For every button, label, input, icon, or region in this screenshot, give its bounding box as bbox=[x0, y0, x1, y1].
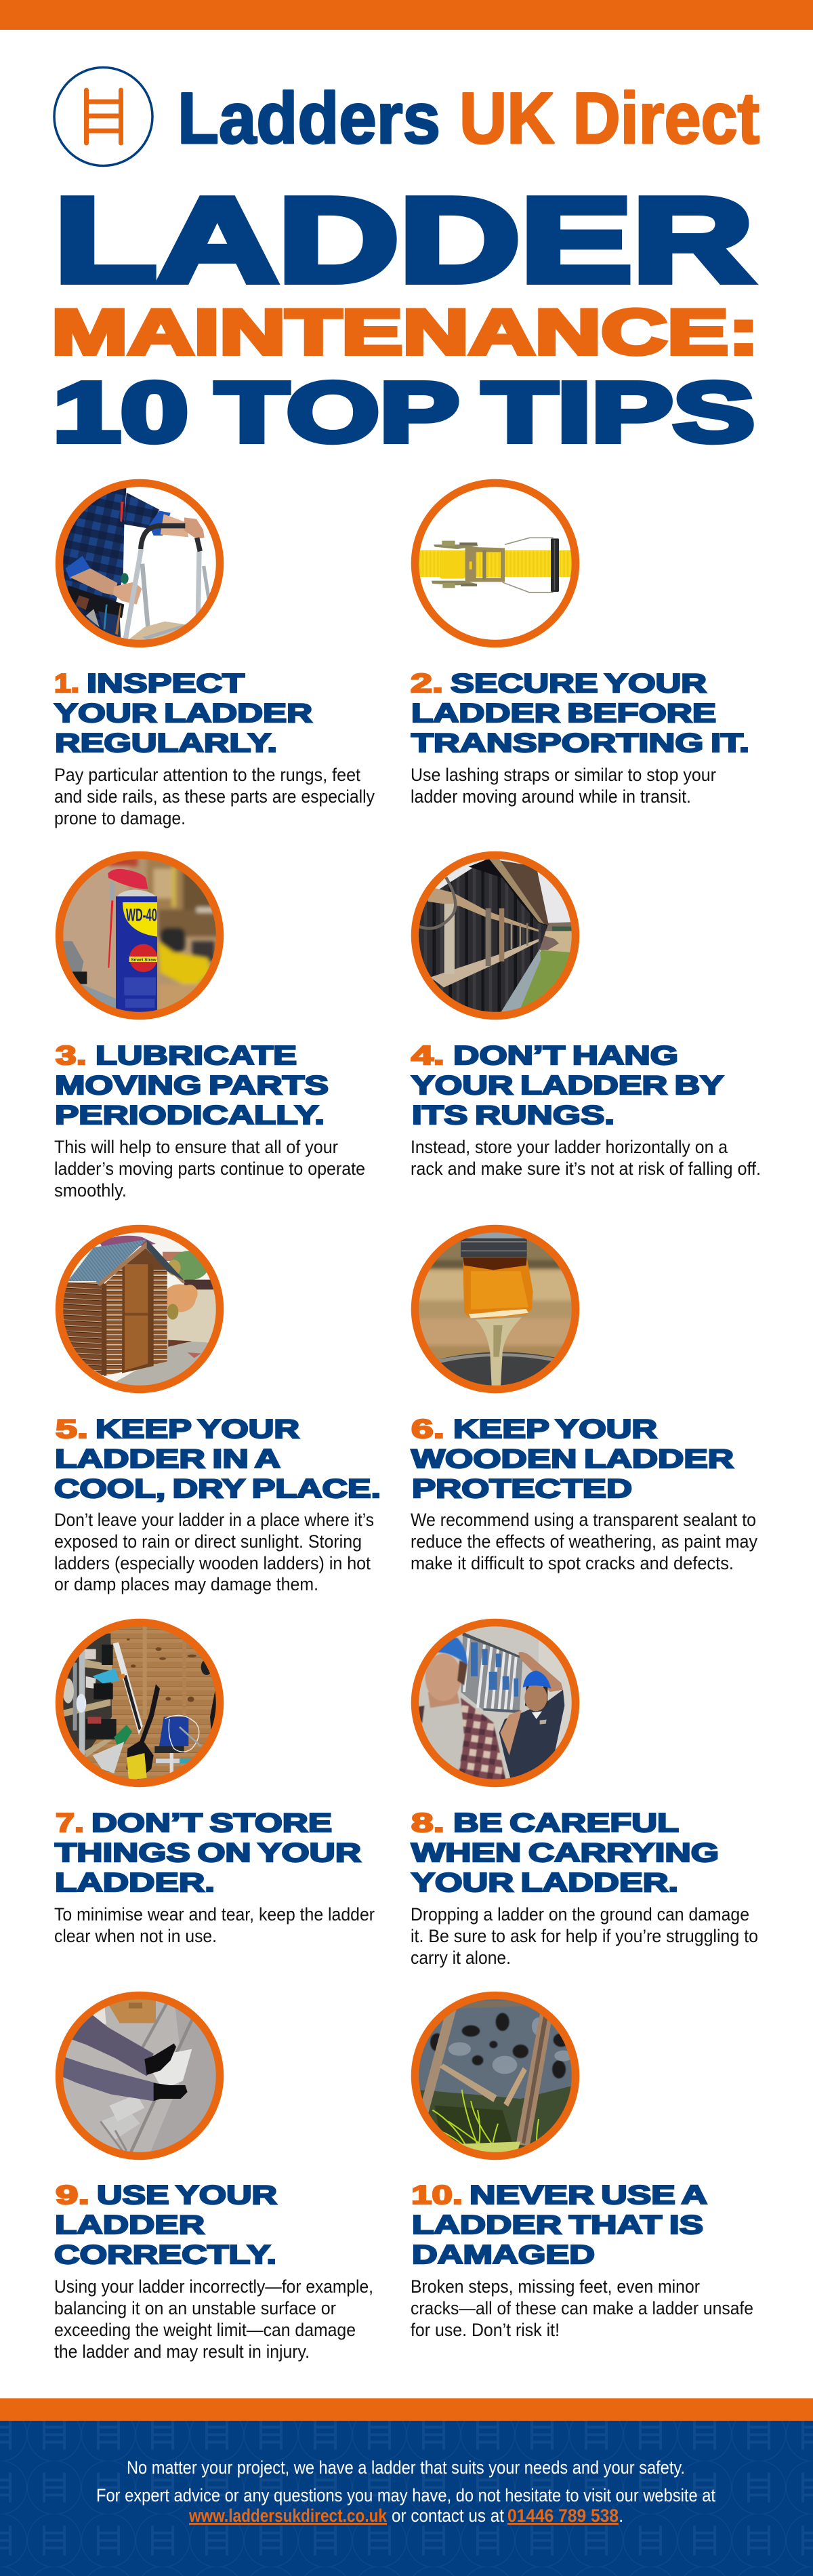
body text: ladders (especially wooden ladders) in hot bbox=[54, 1553, 371, 1573]
logo wordmark bbox=[178, 77, 759, 159]
heading: DON’T HANG bbox=[453, 1041, 678, 1070]
photo: broken ladder rung bbox=[411, 1992, 580, 2160]
logo wordmark: UK Direct bbox=[459, 77, 759, 159]
body text: rack and make sure it’s not at risk of falling off. bbox=[411, 1159, 761, 1179]
body text bbox=[411, 1904, 758, 1968]
body text: exposed to rain or direct sunlight. Storing bbox=[54, 1531, 362, 1552]
photo: spray can in workshop: Smart Straw bbox=[131, 958, 157, 962]
heading: KEEP YOUR bbox=[453, 1415, 657, 1444]
title line: 10 TOP TIPS: TOP bbox=[215, 365, 459, 460]
panel: tip 8 careful when carrying bbox=[403, 1611, 758, 1968]
footer text: or contact us at bbox=[392, 2505, 504, 2526]
heading: LUBRICATE bbox=[96, 1041, 297, 1070]
heading: 6. bbox=[411, 1415, 444, 1444]
heading bbox=[54, 1415, 381, 1504]
photo: person falling from ladder bbox=[56, 1992, 224, 2160]
heading: ITS RUNGS. bbox=[412, 1101, 614, 1130]
body text: cracks—all of these can make a ladder unsafe bbox=[411, 2298, 753, 2318]
heading: LADDER IN A bbox=[55, 1445, 280, 1474]
photo: two workers carrying ladder bbox=[411, 1619, 580, 1787]
body text: This will help to ensure that all of your bbox=[54, 1137, 338, 1157]
heading: MOVING PARTS bbox=[55, 1071, 329, 1100]
panel: tip 4 hanging bbox=[403, 844, 761, 1179]
body text bbox=[411, 2276, 753, 2340]
body text: carry it alone. bbox=[411, 1948, 511, 1968]
heading: 2. bbox=[411, 669, 443, 698]
panel: tip 3 lubricate bbox=[47, 844, 365, 1201]
heading: WHEN CARRYING bbox=[411, 1838, 719, 1868]
heading: WOODEN LADDER bbox=[411, 1445, 734, 1474]
heading: LADDER. bbox=[55, 1868, 215, 1897]
body text: for use. Don’t risk it! bbox=[411, 2320, 560, 2340]
footer text: 01446 789 538 bbox=[507, 2505, 619, 2526]
body text: Instead, store your ladder horizontally on a bbox=[411, 1137, 728, 1157]
body text: Broken steps, missing feet, even minor bbox=[411, 2276, 700, 2297]
title line: 10 TOP TIPS: TIPS bbox=[482, 365, 755, 460]
heading: REGULARLY. bbox=[55, 729, 277, 758]
heading: 5. bbox=[56, 1415, 88, 1444]
body text: Using your ladder incorrectly—for example, bbox=[54, 2276, 373, 2297]
photo: spray can in workshop bbox=[56, 851, 224, 1020]
heading: KEEP YOUR bbox=[96, 1415, 299, 1444]
footer blue patterned background bbox=[0, 2421, 813, 2576]
heading: 4. bbox=[411, 1041, 444, 1070]
footer text: No matter your project, we have a ladder that suits your needs and your safety. bbox=[127, 2457, 685, 2478]
body text bbox=[411, 1137, 761, 1179]
heading: 10. bbox=[411, 2181, 463, 2210]
body text bbox=[54, 765, 375, 828]
body text bbox=[54, 1904, 375, 1946]
body text: Pay particular attention to the rungs, feet bbox=[54, 765, 360, 785]
body text: the ladder and may result in injury. bbox=[54, 2341, 310, 2362]
heading: 9. bbox=[56, 2181, 89, 2210]
body text: exceeding the weight limit—can damage bbox=[54, 2320, 356, 2340]
heading: DAMAGED bbox=[412, 2240, 595, 2270]
panel: tip 1 inspect bbox=[47, 471, 375, 828]
photo: brush dripping sealant bbox=[411, 1224, 580, 1394]
heading bbox=[55, 1809, 361, 1897]
heading: PERIODICALLY. bbox=[55, 1101, 325, 1130]
photo: yellow ratchet strap bbox=[411, 479, 580, 648]
photo: worker on stepladder bbox=[56, 479, 224, 648]
heading: SECURE YOUR bbox=[451, 669, 707, 698]
heading: LADDER BEFORE bbox=[411, 699, 716, 728]
footer orange band bbox=[0, 2398, 813, 2421]
panel: tip 2 secure bbox=[403, 471, 749, 807]
heading: USE YOUR bbox=[97, 2181, 277, 2210]
photo: ladder on barn wall bbox=[411, 851, 580, 1020]
body text: ladder moving around while in transit. bbox=[411, 786, 691, 807]
logo wordmark: Ladders bbox=[178, 77, 440, 159]
body text: it. Be sure to ask for help if you’re struggling to bbox=[411, 1926, 758, 1946]
panel: tip 10 never use damaged bbox=[403, 1984, 753, 2340]
heading bbox=[55, 1041, 329, 1130]
logo bbox=[54, 68, 759, 165]
body text: ladder’s moving parts continue to operate bbox=[54, 1159, 365, 1179]
photo: spray can in workshop: WD-40 bbox=[126, 904, 157, 925]
body text bbox=[411, 765, 716, 807]
heading bbox=[411, 2181, 707, 2270]
heading bbox=[411, 1415, 734, 1504]
title line: LADDER: LADDER bbox=[54, 173, 753, 307]
heading: BE CAREFUL bbox=[453, 1809, 679, 1838]
body text: Use lashing straps or similar to stop your bbox=[411, 765, 716, 785]
heading bbox=[54, 669, 312, 758]
body text: prone to damage. bbox=[54, 808, 186, 828]
heading: LADDER THAT IS bbox=[412, 2211, 703, 2240]
heading: INSPECT bbox=[87, 669, 245, 698]
panel: tip 7 don't store things bbox=[47, 1611, 375, 1946]
heading: LADDER bbox=[55, 2211, 205, 2240]
heading bbox=[54, 2181, 277, 2270]
footer bbox=[0, 2398, 813, 2576]
title line: 10 TOP TIPS bbox=[53, 365, 755, 460]
heading: COOL, DRY PLACE. bbox=[54, 1474, 381, 1504]
heading bbox=[411, 1809, 719, 1897]
body text: Dropping a ladder on the ground can damage bbox=[411, 1904, 749, 1925]
photo: cluttered storage shed bbox=[56, 1619, 224, 1787]
body text: and side rails, as these parts are especially bbox=[54, 786, 375, 807]
footer text: www.laddersukdirect.co.uk bbox=[188, 2505, 388, 2526]
body text: smoothly. bbox=[54, 1180, 127, 1201]
heading: YOUR LADDER bbox=[54, 699, 312, 728]
heading: TRANSPORTING IT. bbox=[411, 729, 749, 758]
heading bbox=[411, 669, 749, 758]
body text: Don’t leave your ladder in a place where it’s bbox=[54, 1510, 374, 1530]
body text bbox=[411, 1510, 757, 1573]
body text bbox=[54, 1510, 374, 1594]
logo icon: ladder in circle bbox=[54, 68, 152, 165]
footer text: . bbox=[619, 2505, 624, 2526]
title bbox=[51, 173, 759, 460]
body text: To minimise wear and tear, keep the ladder bbox=[54, 1904, 375, 1925]
body text: make it difficult to spot cracks and defects. bbox=[411, 1553, 734, 1573]
body text bbox=[54, 2276, 373, 2362]
top orange band bbox=[0, 0, 813, 30]
body text: We recommend using a transparent sealant to bbox=[411, 1510, 756, 1530]
body text: or damp places may damage them. bbox=[54, 1574, 318, 1594]
heading: 7. bbox=[56, 1809, 84, 1838]
heading: 1. bbox=[54, 669, 79, 698]
footer text: For expert advice or any questions you may have, do not hesitate to visit our website at bbox=[96, 2485, 715, 2505]
footer text bbox=[96, 2457, 715, 2526]
title line: 10 TOP TIPS: 10 bbox=[53, 365, 188, 460]
heading: YOUR LADDER. bbox=[411, 1868, 678, 1897]
title line: MAINTENANCE: MAINTENANCE: bbox=[51, 296, 759, 367]
body text: balancing it on an unstable surface or bbox=[54, 2298, 336, 2318]
panel: tip 5 cool dry place bbox=[47, 1217, 381, 1594]
panel: tip 9 use correctly bbox=[47, 1984, 373, 2362]
heading: PROTECTED bbox=[412, 1474, 632, 1504]
heading: NEVER USE A bbox=[470, 2181, 707, 2210]
heading: 8. bbox=[411, 1809, 444, 1838]
photo: wooden shed bbox=[56, 1224, 224, 1394]
heading: THINGS ON YOUR bbox=[55, 1838, 361, 1868]
panel: tip 6 wooden ladder protected bbox=[403, 1217, 757, 1573]
body text bbox=[54, 1137, 365, 1201]
heading: YOUR LADDER BY bbox=[411, 1071, 724, 1100]
heading: DON’T STORE bbox=[91, 1809, 332, 1838]
heading: 3. bbox=[56, 1041, 87, 1070]
body text: reduce the effects of weathering, as paint may bbox=[411, 1531, 757, 1552]
heading: CORRECTLY. bbox=[54, 2240, 276, 2270]
heading bbox=[411, 1041, 724, 1130]
body text: clear when not in use. bbox=[54, 1926, 217, 1946]
